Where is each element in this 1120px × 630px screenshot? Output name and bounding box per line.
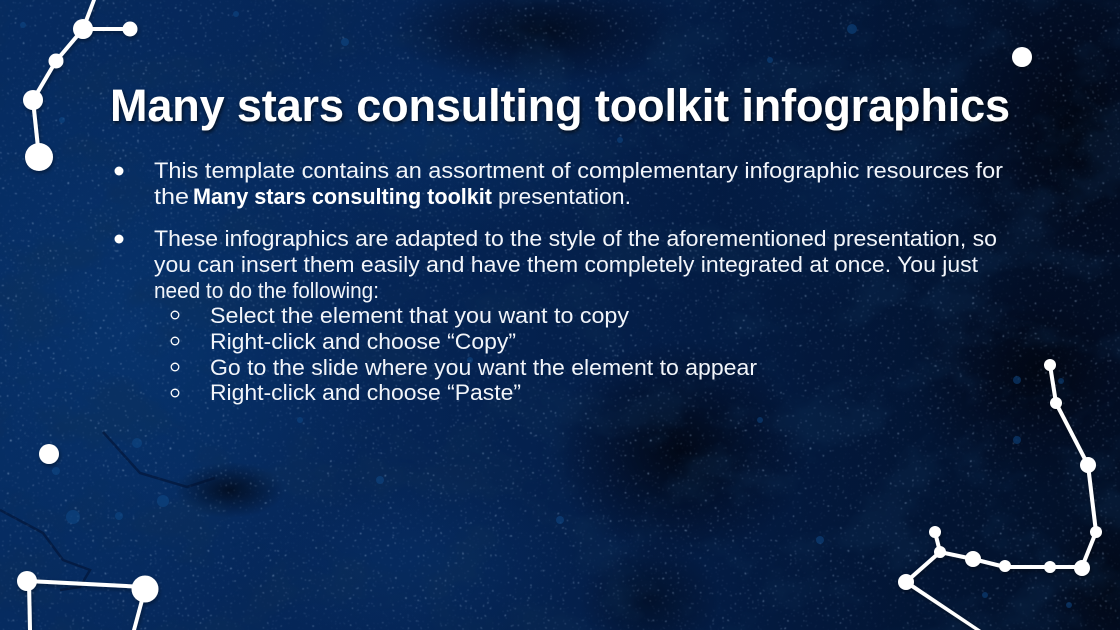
constellation: bottom right (898, 359, 1102, 630)
star: top right (1012, 47, 1032, 67)
list: steps: Go to the slide where you want the element to appear (210, 355, 757, 380)
text block: second bullet: These infographics are adapted to the style of the aforementioned presentation, so (154, 226, 997, 251)
star: left middle (39, 444, 59, 464)
text block: first bullet: the (154, 184, 189, 209)
list: steps: Right-click and choose “Paste” (210, 380, 521, 405)
list: steps (171, 303, 757, 405)
constellation: bottom left (17, 571, 158, 630)
text block: first bullet: Many stars consulting toolkit (193, 184, 493, 209)
title: Many stars consulting toolkit infographics (110, 80, 1010, 131)
text block: first bullet (114, 158, 1003, 209)
list: steps: Right-click and choose “Copy” (210, 329, 516, 354)
constellation: top left (23, 0, 138, 171)
text block: first bullet: presentation. (498, 184, 631, 209)
text block: second bullet: need to do the following: (154, 278, 379, 303)
text block: second bullet (114, 226, 997, 303)
text block: second bullet: you can insert them easily and have them completely integrated at once. You just (154, 252, 978, 277)
list: steps: Select the element that you want to copy (210, 303, 629, 328)
text block: first bullet: This template contains an assortment of complementary infographic resources for (154, 158, 1003, 183)
